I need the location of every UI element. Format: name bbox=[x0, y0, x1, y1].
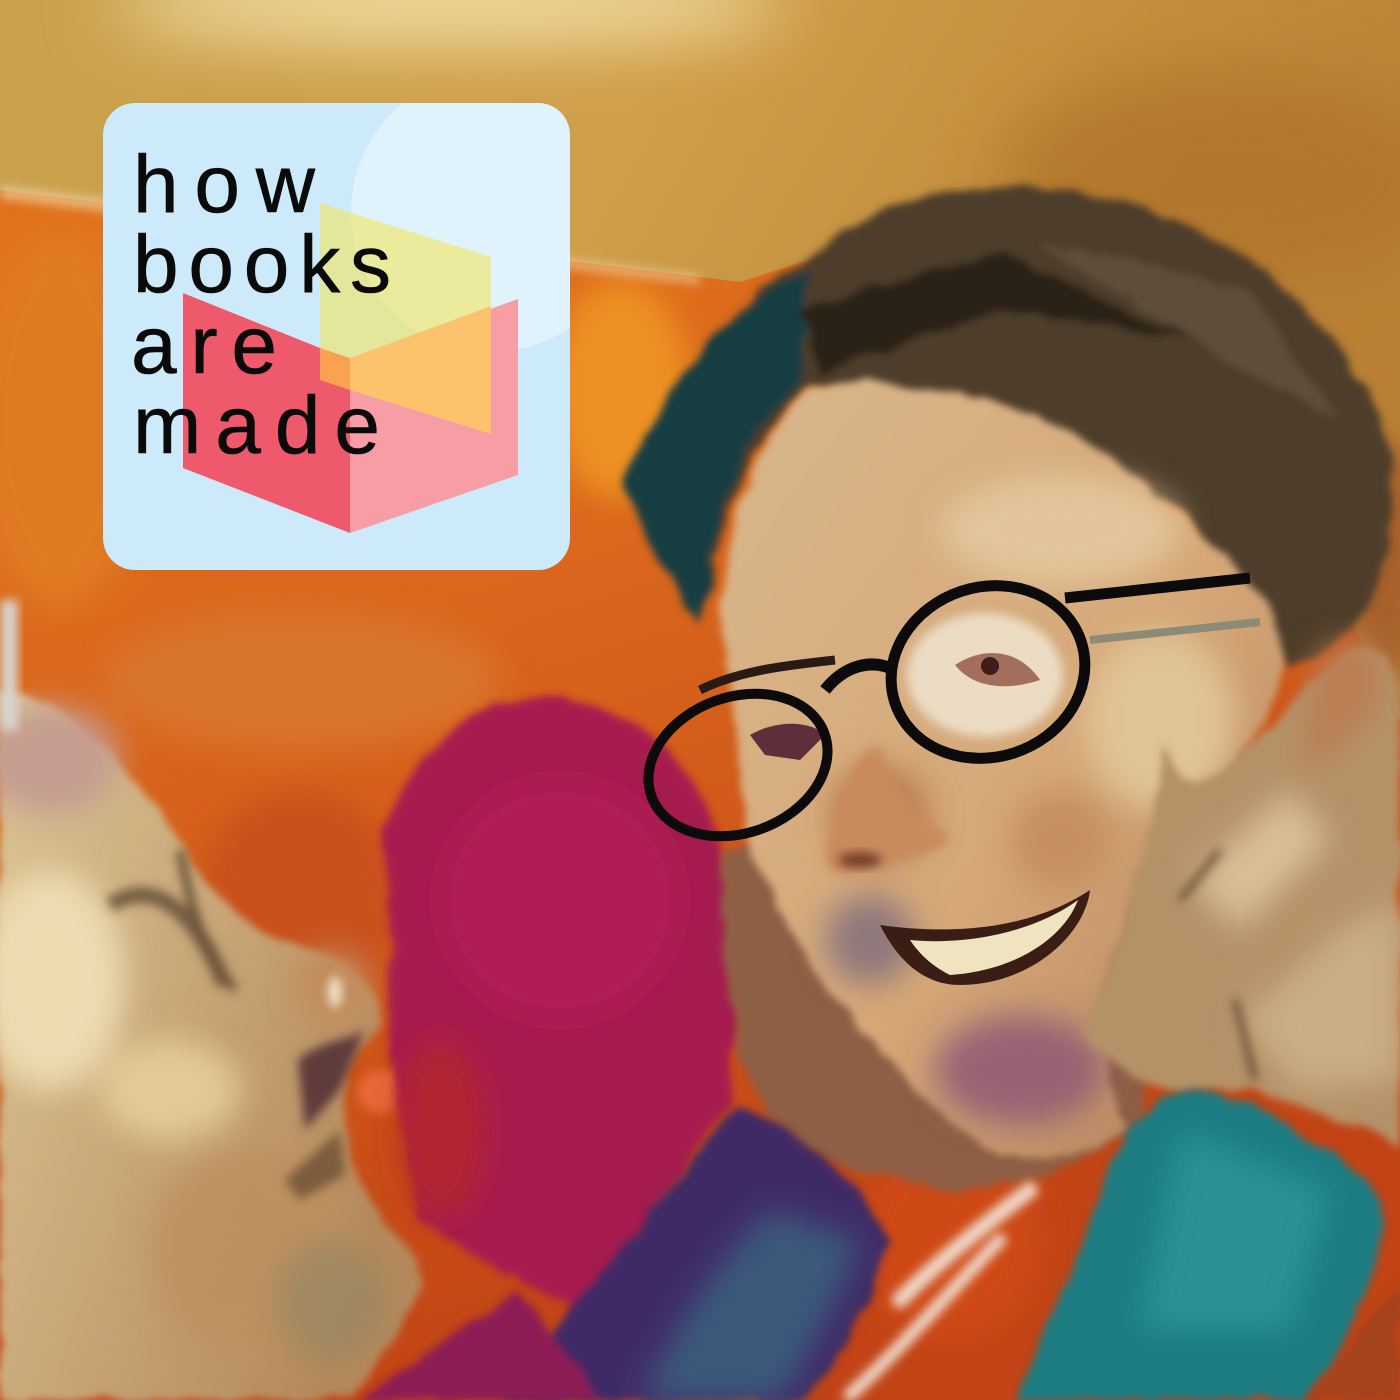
younger person's hand bbox=[1085, 640, 1400, 1150]
white scarf strokes bbox=[850, 1190, 1030, 1395]
logo wordmark bbox=[131, 139, 391, 471]
logo wordmark: made bbox=[133, 380, 380, 471]
purple sleeve bbox=[360, 1105, 890, 1400]
logo book icon bbox=[183, 203, 518, 533]
younger person's neck bbox=[721, 830, 1170, 1190]
teal sweater bbox=[1015, 1089, 1400, 1400]
older person's hair bbox=[0, 600, 18, 730]
hair bbox=[622, 186, 1391, 670]
logo tile bbox=[103, 103, 570, 570]
younger person's face bbox=[720, 382, 1282, 1158]
ochre ceiling bbox=[0, 0, 1400, 720]
logo wordmark: books bbox=[133, 219, 391, 310]
eye, nose and mouth bbox=[700, 613, 1090, 985]
smile bbox=[880, 890, 1090, 985]
older person's face bbox=[0, 690, 418, 1400]
logo sun circle bbox=[351, 103, 570, 350]
teeth bbox=[910, 900, 1078, 975]
logo wordmark: are bbox=[131, 300, 277, 391]
orange lip highlight bbox=[358, 1070, 406, 1114]
logo wordmark: how bbox=[133, 139, 316, 230]
glasses bbox=[628, 561, 1260, 860]
crimson shadow bbox=[385, 699, 738, 1320]
